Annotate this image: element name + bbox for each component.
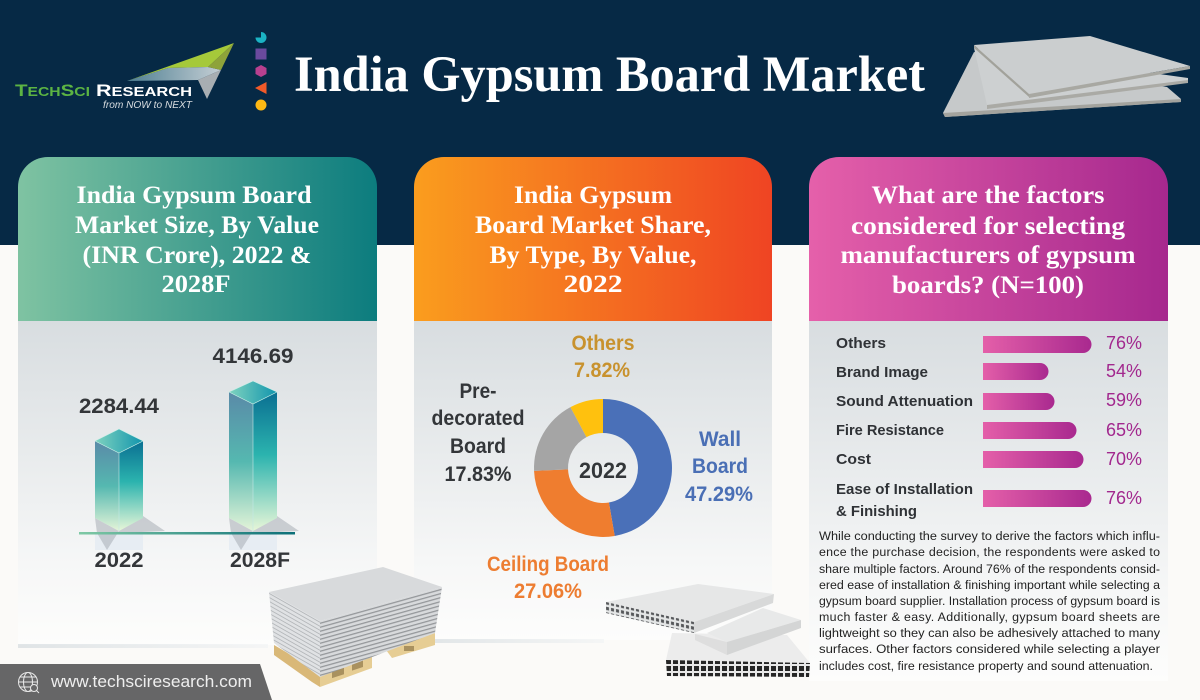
row: Ease of Installation & Finishing 76%	[836, 481, 1142, 520]
row: Others 76%: 76%	[1106, 333, 1142, 353]
panel bottom edge shadows	[18, 639, 604, 648]
panel header: market size: 2028F	[162, 271, 230, 298]
logo: TechSci Research: R ESEARCH	[96, 81, 192, 100]
survey description text: share multiple factors. Around 76% of the respondents consid-	[819, 562, 1160, 576]
panel header: selection factors: boards? (N=100)	[892, 272, 1084, 299]
row: Sound Attenuation 59%: Sound Attenuation	[836, 393, 973, 410]
survey description text: ence the purchase decision, the respondents were asked to	[819, 545, 1160, 559]
logo: TechSci Research: from NOW to NEXT	[103, 100, 193, 111]
label: Wall Board	[685, 428, 753, 506]
survey description text: While conducting the survey to derive the factors which influ-	[819, 529, 1160, 543]
footer: website bar	[0, 664, 272, 700]
segment: Ceiling Board	[534, 469, 615, 537]
label: Pre-decorated Board: Board	[450, 435, 506, 458]
label: Pre-decorated Board: decorated	[432, 407, 524, 430]
label: Pre-decorated Board	[432, 380, 524, 486]
panel header: market size	[18, 157, 377, 321]
donut chart	[534, 399, 672, 537]
panel header: selection factors	[809, 157, 1168, 321]
label: Ceiling Board: Ceiling Board	[487, 553, 609, 576]
survey description text: lightweight so they can also be adhesively attached to many	[819, 626, 1161, 640]
survey description text: ered ease of installation & finishing important while selecting a	[819, 578, 1160, 592]
survey description text: surfaces. Other factors considered while selecting a player	[819, 642, 1160, 656]
image: gypsum board stack on pallet	[269, 567, 442, 687]
label: Pre-decorated Board: 17.83%	[444, 463, 512, 486]
donut centre label: 2022	[579, 458, 627, 483]
panel header: selection factors: manufacturers of gypsum	[840, 242, 1136, 269]
category: 2028F: 2028F	[230, 549, 290, 572]
row: Others 76%	[836, 333, 1142, 353]
survey description text	[819, 529, 1161, 673]
board stack sides	[269, 592, 320, 677]
panel body: selection factors	[809, 321, 1168, 681]
label: Others	[572, 332, 634, 382]
segment: Pre-decorated Board	[534, 407, 586, 471]
label: Others: Others	[572, 332, 634, 355]
value: 2028F: 4146.69	[212, 345, 294, 368]
row: Ease of Installation & Finishing 76%: Ease of Installation	[836, 481, 973, 498]
row: Brand Image 54%: 54%	[1106, 361, 1142, 381]
row: Cost 70%: 70%	[1106, 449, 1142, 469]
value: 2022: 2284.44	[79, 395, 159, 418]
panel header: market share: India Gypsum	[514, 182, 672, 209]
top board	[606, 584, 774, 622]
label: Wall Board: Board	[692, 455, 748, 478]
label: Ceiling Board: 27.06%	[514, 580, 582, 603]
row: Sound Attenuation 59%	[836, 390, 1142, 410]
row: Cost 70%	[836, 449, 1142, 469]
category: 2022: 2022	[94, 549, 144, 572]
row: Fire Resistance 65%	[836, 420, 1142, 440]
label: Wall Board: 47.29%	[685, 483, 753, 506]
bar: 2028F	[229, 381, 277, 531]
website url: www.techsciresearch.com	[50, 672, 252, 691]
survey description text: gypsum board supplier. Installation process of gypsum board is	[819, 594, 1160, 608]
pallet	[274, 633, 435, 687]
panel header: market share: Board Market Share,	[475, 212, 711, 239]
middle board	[707, 608, 801, 642]
panel header: market size: India Gypsum Board	[76, 182, 312, 209]
segment: Others	[570, 399, 603, 437]
panel header: market size: (INR Crore), 2022 &	[82, 242, 312, 269]
row: Ease of Installation & Finishing 76%: 76%	[1106, 488, 1142, 508]
label: Wall Board: Wall	[699, 428, 741, 451]
icon column: shapes	[255, 32, 266, 110]
panel header: market share: 2022	[564, 271, 622, 298]
panel body: market size	[18, 321, 377, 645]
panel: market size	[18, 157, 377, 645]
row: Fire Resistance 65%: 65%	[1106, 420, 1142, 440]
panel header: market share: By Type, By Value,	[490, 242, 696, 269]
panel: selection factors	[809, 157, 1168, 681]
row: Brand Image 54%	[836, 361, 1142, 381]
row: Ease of Installation & Finishing 76%: & Finishing	[836, 503, 917, 520]
bottom board	[666, 633, 810, 663]
panel header: market size: Market Size, By Value	[75, 212, 319, 239]
segment: Wall Board	[603, 399, 672, 536]
image: hollow core boards	[606, 584, 810, 677]
label: Others: 7.82%	[574, 359, 630, 382]
panel body: market share	[414, 321, 772, 640]
panel: market share	[414, 157, 772, 640]
row: Cost 70%: Cost	[836, 451, 871, 468]
horizontal bar chart	[836, 333, 1142, 520]
row: Others 76%: Others	[836, 335, 886, 352]
label: Ceiling Board	[487, 553, 609, 603]
survey description text: includes cost, fire resistance property and sound attenuation.	[819, 659, 1153, 673]
row: Fire Resistance 65%: Fire Resistance	[836, 422, 944, 439]
panel header: selection factors: considered for selecting	[851, 213, 1126, 240]
bar: 2022	[95, 429, 143, 531]
logo: TechSci Research: TECH SCI	[15, 81, 90, 100]
survey description text: much faster & easy. Additionally, gypsum board sheets are	[819, 610, 1160, 624]
row: Sound Attenuation 59%: 59%	[1106, 390, 1142, 410]
panel header: market share	[414, 157, 772, 321]
label: Pre-decorated Board: Pre-	[460, 380, 496, 403]
panel header: selection factors: What are the factors	[872, 182, 1105, 209]
logo: TechSci Research	[15, 43, 234, 111]
title: India Gypsum Board Market	[294, 47, 925, 103]
row: Brand Image 54%: Brand Image	[836, 364, 928, 381]
bar chart: market size	[79, 345, 299, 572]
image: stacked gypsum boards	[943, 36, 1190, 117]
icon: globe search	[18, 672, 39, 693]
bar shadows and reflection	[95, 516, 299, 550]
board stack top	[269, 567, 442, 621]
baseline	[79, 532, 295, 534]
